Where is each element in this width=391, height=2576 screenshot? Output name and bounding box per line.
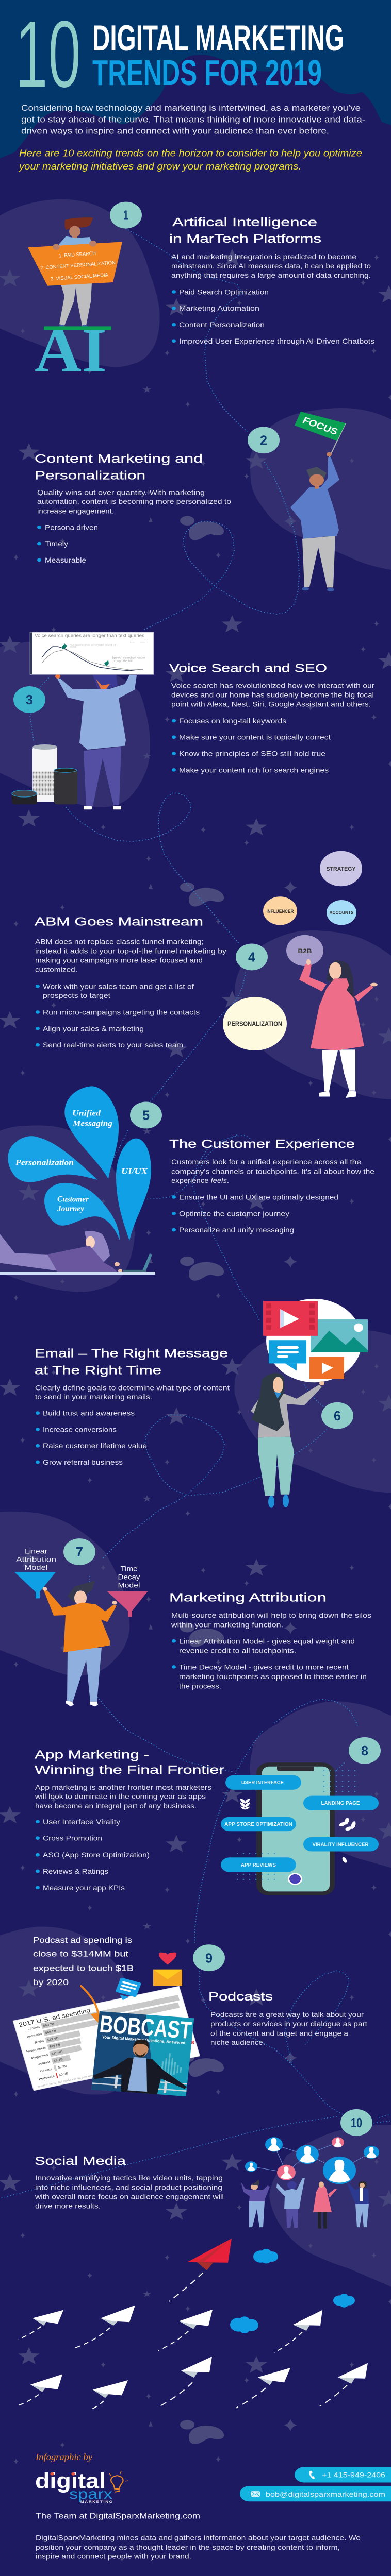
contact: phone: +1 415-949-2406 bbox=[322, 2471, 385, 2479]
number badge 1: 1 bbox=[123, 208, 128, 223]
illustration: person holding two funnels bbox=[14, 1548, 148, 1706]
body text: products or services in your dialogue as part bbox=[210, 2021, 367, 2028]
body text: Quality wins out over quantity. With marketing bbox=[37, 489, 205, 497]
illustration: group of people bbox=[241, 2178, 369, 2229]
about paragraph bbox=[36, 2535, 361, 2561]
body text: Customers look for a unified experience across all the bbox=[171, 1159, 361, 1166]
callout: podcast ad spending: by 2020 bbox=[33, 1977, 69, 1987]
illustration: woman with topic bubbles: STRATEGY bbox=[326, 866, 356, 872]
number badge 2 bbox=[248, 427, 280, 453]
header blue sky bbox=[0, 0, 391, 160]
body text bbox=[171, 253, 371, 279]
bullet list: the process. bbox=[179, 1683, 221, 1690]
heading bbox=[169, 216, 321, 245]
illustration: woman with topic bubbles: ACCOUNTS bbox=[329, 910, 354, 916]
chart: 2017 US ad spending: e bbox=[189, 2038, 196, 2046]
illustration: plane dashed trails bbox=[18, 2273, 347, 2410]
chart: 2017 US ad spending: 2017 U.S. ad spending bbox=[18, 2007, 91, 2028]
illustration: person holding sign on AI letters: 1. PAID SEARCH bbox=[59, 250, 96, 259]
number badge 6 bbox=[321, 1402, 353, 1429]
intro paragraph: driven ways to inspire and connect with your audience than ever before. bbox=[21, 126, 329, 135]
heading: Podcasts bbox=[208, 1990, 273, 2003]
bullet list: Work with your sales team and get a list of bbox=[43, 983, 194, 991]
illustration: arrow and chat icon bbox=[81, 1977, 141, 2024]
intro paragraph bbox=[21, 104, 365, 135]
illustration: red paper plane leader bbox=[187, 2239, 232, 2270]
bullet list bbox=[36, 983, 200, 1049]
body text bbox=[210, 2011, 367, 2047]
bullet list: Cross Promotion bbox=[43, 1835, 102, 1842]
callout: podcast ad spending bbox=[33, 1935, 134, 1987]
heading: Voice Search and SEO bbox=[169, 662, 327, 675]
illustration: person holding two funnels: Decay bbox=[118, 1574, 140, 1581]
chart: 2017 US ad spending: $17.6B bbox=[47, 2037, 59, 2042]
number badge 4: 4 bbox=[248, 950, 255, 965]
bullet list: Persona driven bbox=[45, 524, 98, 532]
body text: customized. bbox=[35, 967, 77, 974]
about paragraph: inspire and connect people with your brand. bbox=[36, 2553, 191, 2561]
illustration: phone with feature pills bbox=[221, 1762, 379, 1895]
chart: voice search queries: Text searches more concentrated around 1-3 bbox=[70, 643, 117, 646]
number badge 3 bbox=[13, 686, 45, 713]
body text: Clearly define goals to determine what type of content bbox=[35, 1384, 230, 1392]
body text bbox=[171, 1159, 374, 1184]
bullet list: Make sure your content is topically correct bbox=[179, 734, 331, 741]
illustration: clouds bbox=[230, 2249, 355, 2333]
bullet list: Run micro-campaigns targeting the contacts bbox=[43, 1009, 200, 1016]
contact: phone bbox=[295, 2467, 391, 2482]
about paragraph: position your company as a thought leader in the space by creating content to inform, bbox=[36, 2544, 340, 2552]
bullet list: Time Decay Model - gives credit to more recent bbox=[179, 1664, 349, 1671]
body text: Innovative amplifying tactics like video units, tapping bbox=[35, 2175, 223, 2182]
bullet list: User Interface Virality bbox=[43, 1819, 121, 1826]
panel: trend 4 ABM bbox=[35, 851, 378, 1098]
icon: envelope bbox=[153, 1970, 182, 1986]
bullet list: Improved User Experience through AI-Driven Chatbots bbox=[179, 338, 374, 345]
illustration: phone with feature pills: LANDING PAGE bbox=[321, 1801, 360, 1806]
chart: 2017 US ad spending bbox=[13, 1986, 200, 2091]
illustration: woman on laptop with idea petals bbox=[0, 1086, 155, 1275]
panel: trend 10 social media bbox=[35, 2109, 379, 2229]
heading: Email – The Right Message bbox=[35, 1347, 228, 1360]
body text bbox=[35, 2175, 224, 2210]
heading: Social Media bbox=[35, 2155, 126, 2167]
body text: automation, content is becoming more personalized to bbox=[37, 498, 231, 506]
dotted journey path connecting numbered trends bbox=[0, 228, 391, 2198]
panel: trend 5 customer experience bbox=[0, 1086, 374, 1275]
chart: voice search queries: Voice search queries are longer than text queries bbox=[35, 633, 144, 638]
bullet list: Reviews & Ratings bbox=[43, 1868, 108, 1876]
chart: 2017 US ad spending: $68.5B bbox=[45, 2029, 57, 2035]
panel: trend 1 artificial intelligence bbox=[28, 202, 374, 385]
illustration: person holding sign on AI letters: 3. VISUAL SOCIAL MEDIA bbox=[51, 272, 109, 282]
contact: email: bob@digitalsparxmarketing.com bbox=[266, 2490, 385, 2499]
bullet list: Measure your app KPIs bbox=[43, 1885, 125, 1892]
body text: into niche influencers, and social product positioning bbox=[35, 2184, 222, 2192]
panel: trend 6 email bbox=[35, 1299, 368, 1508]
chart: voice search queries: through the tail bbox=[112, 660, 133, 663]
illustration: woman on laptop with idea petals: Personalization bbox=[15, 1158, 74, 1167]
body text: within your marketing function. bbox=[171, 1622, 283, 1629]
chart: 2017 US ad spending: Internet bbox=[27, 2025, 40, 2031]
body text: have become an integral part of any business. bbox=[35, 1803, 197, 1810]
body text: mainstream. Since AI measures data, it can be applied to bbox=[171, 263, 371, 270]
logo: digital sparx marketing: MARKETING bbox=[80, 2499, 112, 2504]
illustration: phone with feature pills: APP STORE OPTIMIZATION bbox=[224, 1822, 292, 1827]
illustration: phone with feature pills: VIRALITY INFLUENCER bbox=[312, 1842, 369, 1848]
chart: 2017 US ad spending: Source: Zenith (all media except podcasts) bbox=[38, 2074, 95, 2089]
bullet list: Raise customer lifetime value bbox=[43, 1443, 147, 1450]
chart: 2017 US ad spending: Cinema bbox=[40, 2067, 53, 2073]
body text: App marketing is another frontier most marketers bbox=[35, 1784, 211, 1792]
number badge 3: 3 bbox=[26, 692, 33, 707]
body text: niche audience. bbox=[210, 2039, 265, 2047]
chart: voice search queries: words bbox=[70, 646, 76, 648]
number badge 9: 9 bbox=[205, 1951, 213, 1966]
number badge 8 bbox=[349, 1737, 381, 1764]
illustration: person holding sign on AI letters bbox=[28, 217, 122, 385]
heading: Winning the Final Frontier bbox=[35, 1764, 225, 1776]
illustration: woman on laptop with idea petals: Unified bbox=[72, 1108, 101, 1117]
body text: drive more results. bbox=[35, 2202, 101, 2210]
illustration: woman on laptop with idea petals: Customer bbox=[57, 1194, 89, 1204]
chart: 2017 US ad spending: Newspapers bbox=[26, 2046, 46, 2054]
panel: trend 2 content marketing bbox=[35, 412, 346, 591]
chart: 2017 US ad spending: $9.7B bbox=[53, 2058, 63, 2063]
bullet list: Increase conversions bbox=[43, 1427, 117, 1434]
body text: to send in your marketing emails. bbox=[35, 1394, 152, 1401]
logo: digital sparx marketing: digital bbox=[35, 2468, 106, 2493]
bobcast cover bbox=[91, 2010, 194, 2096]
number badge 10 bbox=[340, 2109, 372, 2136]
chart: 2017 US ad spending: Outdoor bbox=[37, 2060, 51, 2066]
title block bbox=[15, 1, 344, 108]
bullet list: Ensure the UI and UX are optimally designed bbox=[179, 1194, 338, 1201]
illustration: woman on laptop with idea petals: UI/UX bbox=[121, 1166, 148, 1176]
illustration: person with focus flag bbox=[290, 412, 346, 591]
bullet list: Send real-time alerts to your sales team bbox=[43, 1042, 183, 1049]
chart: voice search queries bbox=[30, 632, 154, 674]
heading: at The Right Time bbox=[35, 1364, 161, 1377]
body text: will look to dominate in the coming year as apps bbox=[35, 1793, 206, 1801]
chart: voice search queries: Speech searches longer bbox=[112, 657, 145, 659]
chart: 2017 US ad spending: Radio bbox=[35, 2040, 45, 2045]
body text: increase engagement. bbox=[37, 508, 114, 515]
bobcast cover: Your Digital Marketing Questions, Answered. bbox=[102, 2035, 187, 2045]
footer bbox=[35, 2452, 391, 2561]
body text bbox=[35, 938, 227, 974]
body text: with overall more focus on audience engagement will bbox=[35, 2194, 224, 2201]
heading: The Customer Experience bbox=[169, 1138, 355, 1151]
body text: devices and our home has suddenly become the big focal bbox=[171, 692, 374, 699]
bullet list: marketing touchpoints as opposed to those earlier in bbox=[179, 1673, 367, 1681]
bullet list: Make your content rich for search engines bbox=[179, 767, 329, 774]
bullet list bbox=[36, 1410, 147, 1467]
logo: digital sparx marketing: sparx bbox=[69, 2486, 112, 2502]
intro paragraph: Considering how technology and marketing is intertwined, as a marketer you’ve bbox=[21, 104, 361, 113]
bullet list bbox=[172, 289, 374, 345]
body text bbox=[171, 682, 374, 708]
number badge 10: 10 bbox=[351, 2115, 362, 2130]
bullet list: revenue credit to all touchpoints. bbox=[179, 1648, 296, 1655]
body text: ABM does not replace classic funnel marketing; bbox=[35, 938, 204, 946]
illustration: person holding sign on AI letters: 2. CONTENT PERSONALIZATION bbox=[40, 260, 116, 271]
yellow lead-in: Here are 10 exciting trends on the horizon to consider to help you optimize bbox=[19, 148, 362, 159]
illustration: phone with feature pills: APP REVIEWS bbox=[241, 1862, 276, 1868]
heading: ABM Goes Mainstream bbox=[35, 915, 203, 928]
bullet list: ASO (App Store Optimization) bbox=[43, 1852, 150, 1859]
bullet list: Optimize the customer journey bbox=[179, 1210, 290, 1218]
callout: podcast ad spending: Podcast ad spending is bbox=[33, 1935, 132, 1945]
heading: Personalization bbox=[35, 469, 145, 482]
number badge 7: 7 bbox=[76, 1545, 83, 1560]
illustration: person holding two funnels: Model bbox=[24, 1564, 47, 1572]
number badge 4 bbox=[236, 943, 268, 970]
illustration: person holding two funnels: Attribution bbox=[16, 1556, 56, 1564]
illustration: woman on laptop with idea petals: Journey bbox=[57, 1204, 84, 1213]
number badge 2: 2 bbox=[260, 433, 267, 448]
bullet list bbox=[36, 1819, 150, 1892]
body text: AI and marketing integration is predicted to become bbox=[171, 253, 356, 261]
bullet list: Timely bbox=[45, 540, 69, 548]
chart: 2017 US ad spending: $0.9B bbox=[57, 2064, 68, 2070]
bullet list: Know the principles of SEO still hold true bbox=[179, 751, 325, 758]
illustration: person holding sign on AI letters: AI bbox=[35, 315, 107, 385]
body text bbox=[35, 1784, 211, 1810]
bullet list: Align your sales & marketing bbox=[43, 1025, 144, 1033]
yellow lead-in bbox=[18, 148, 362, 172]
panel: trend 8 app marketing bbox=[35, 1737, 381, 1895]
bullet list bbox=[37, 524, 98, 564]
header mountain shape bbox=[0, 55, 391, 164]
callout: podcast ad spending: close to $314MM but bbox=[33, 1949, 128, 1958]
bullet list: Focuses on long-tail keywords bbox=[179, 718, 286, 725]
bullet list bbox=[172, 718, 331, 774]
bullet list: Measurable bbox=[45, 557, 86, 564]
illustration: person with smart speakers bbox=[12, 674, 137, 809]
illustration: phone with feature pills: USER INTERFACE bbox=[241, 1780, 284, 1786]
chart: 2017 US ad spending: Podcasts bbox=[38, 2075, 55, 2081]
heading: App Marketing - bbox=[35, 1749, 149, 1761]
illustration: person holding two funnels: Linear bbox=[25, 1548, 47, 1555]
number badge 8: 8 bbox=[361, 1743, 368, 1758]
yellow lead-in: your marketing initiatives and grow your marketing programs. bbox=[18, 161, 301, 172]
panel: trend 7 marketing attribution bbox=[14, 1538, 371, 1706]
team line: The Team at DigitalSparxMarketing.com bbox=[36, 2511, 200, 2520]
body text: company’s channels or touchpoints. It’s all about how the bbox=[171, 1168, 374, 1176]
contact: email bbox=[240, 2486, 391, 2501]
body text: experience feels. bbox=[171, 1177, 229, 1184]
body text: Multi-source attribution will help to bring down the silos bbox=[171, 1612, 371, 1620]
illustration: white paper planes bbox=[30, 2306, 368, 2398]
bullet list: Content Personalization bbox=[179, 321, 265, 329]
number badge 7 bbox=[63, 1538, 95, 1565]
heading bbox=[35, 452, 203, 482]
body text: Podcasts are a great way to talk about your bbox=[210, 2011, 364, 2019]
bullet list: Marketing Automation bbox=[179, 305, 259, 313]
heading: Artifical Intelligence bbox=[172, 216, 317, 229]
illustration: person with focus flag: FOCUS bbox=[301, 415, 339, 437]
bullet list bbox=[172, 1194, 338, 1234]
bullet list: Linear Attribution Model - gives equal weight and bbox=[179, 1638, 355, 1646]
illustration: woman with topic bubbles bbox=[223, 851, 378, 1098]
chart: 2017 US ad spending: $16.6B bbox=[49, 2043, 61, 2049]
panel: trend 3 voice search bbox=[12, 632, 374, 809]
number badge 5: 5 bbox=[142, 1108, 150, 1123]
body text bbox=[35, 1384, 230, 1401]
chart: 2017 US ad spending: Television bbox=[26, 2032, 42, 2039]
body text bbox=[37, 489, 231, 515]
heading: Marketing Attribution bbox=[169, 1591, 327, 1604]
bullet list: prospects to target bbox=[43, 992, 110, 1000]
chart: 2017 US ad spending: $69.2B bbox=[43, 2022, 55, 2028]
bullet list: Personalize and unify messaging bbox=[179, 1227, 294, 1234]
chart: 2017 US ad spending: $0.3B bbox=[58, 2072, 69, 2077]
number badge 9 bbox=[193, 1944, 225, 1971]
chart: 2017 US ad spending: Magazines bbox=[31, 2054, 48, 2060]
bullet list: Paid Search Optimization bbox=[179, 289, 269, 296]
illustration: person holding two funnels: Time bbox=[120, 1566, 137, 1573]
bullet list: Grow referral business bbox=[43, 1459, 123, 1467]
body text: of the content and target and engage a bbox=[210, 2030, 349, 2038]
icon: heart bbox=[159, 1953, 176, 1965]
about paragraph: DigitalSparxMarketing mines data and gathers intformation about your target audience. We bbox=[36, 2535, 361, 2542]
illustration: social network nodes bbox=[245, 2137, 379, 2184]
illustration: person holding two funnels: Model bbox=[118, 1582, 140, 1589]
chart: 2017 US ad spending: $15.4B bbox=[51, 2050, 63, 2056]
callout: podcast ad spending: expected to touch $1B bbox=[33, 1963, 134, 1973]
number badge 6: 6 bbox=[334, 1409, 341, 1423]
illustration: woman on laptop with idea petals: Messaging bbox=[72, 1118, 112, 1128]
body text bbox=[171, 1612, 371, 1629]
big number 10: 10 bbox=[15, 1, 81, 108]
body text: anything that requires a large amount of data crunching. bbox=[171, 272, 371, 279]
heading: in MarTech Platforms bbox=[169, 232, 321, 245]
body text: Voice search has revolutionized how we interact with our bbox=[171, 682, 374, 690]
number badge 1 bbox=[110, 202, 142, 228]
number badge 5 bbox=[130, 1102, 162, 1128]
bullet list bbox=[172, 1638, 367, 1690]
body text: instead it adds to your top-of-the funnel marketing by bbox=[35, 948, 227, 955]
illustration: woman with topic bubbles: PERSONALIZATION bbox=[227, 1020, 282, 1027]
heading: Content Marketing and bbox=[35, 452, 203, 465]
bobcast cover: BOBCAST bbox=[99, 2010, 193, 2044]
panel: trend 9 podcasts bbox=[13, 1935, 367, 2096]
bullet list: Build trust and awareness bbox=[43, 1410, 135, 1417]
body text: point with Alexa, Nest, Siri, Google Assistant and others. bbox=[171, 701, 371, 708]
body text: making your campaigns more laser focused and bbox=[35, 957, 203, 964]
logo: digital sparx marketing bbox=[35, 2468, 128, 2504]
heading bbox=[35, 1749, 225, 1776]
intro paragraph: got to stay ahead of the curve. That means thinking of more innovative and data- bbox=[21, 115, 365, 124]
infographic by label: Infographic by bbox=[35, 2452, 92, 2462]
illustration: woman with topic bubbles: B2B bbox=[298, 947, 312, 955]
heading bbox=[35, 1347, 228, 1377]
illustration: woman with topic bubbles: INFLUENCER bbox=[266, 909, 294, 914]
illustration: woman holding content circle bbox=[251, 1299, 368, 1508]
